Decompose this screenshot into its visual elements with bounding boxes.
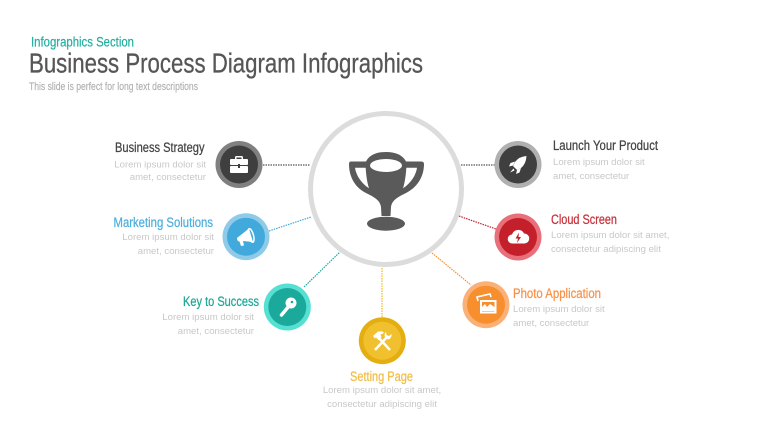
connector: setting page xyxy=(381,268,383,317)
label: business strategy xyxy=(114,140,207,183)
label: launch your product: amet, consectetur xyxy=(553,171,630,182)
icon: hammer and wrench xyxy=(373,332,392,350)
subtitle: This slide is perfect for long text descriptions xyxy=(29,81,198,93)
icon: megaphone xyxy=(237,228,255,246)
icon: key xyxy=(282,298,296,315)
label: key to success: Lorem ipsum dolor sit xyxy=(162,312,254,323)
connector: key to success xyxy=(304,252,340,287)
node: marketing solutions xyxy=(222,213,270,260)
node: business strategy xyxy=(216,141,262,188)
icon: rocket xyxy=(509,156,526,174)
label: cloud screen: Cloud Screen xyxy=(551,212,617,227)
label: setting page xyxy=(323,369,441,410)
label: launch your product: Lorem ipsum dolor sit xyxy=(553,157,645,168)
central trophy circle xyxy=(310,114,462,264)
label: key to success: Key to Success xyxy=(183,294,259,309)
title: Business Process Diagram Infographics xyxy=(29,48,423,78)
label: key to success xyxy=(162,294,259,337)
icon: cloud xyxy=(508,230,529,244)
connector: business strategy xyxy=(263,164,310,166)
label: cloud screen: Lorem ipsum dolor sit amet, xyxy=(551,230,669,241)
connector: launch your product xyxy=(461,164,495,166)
label: marketing solutions: amet, consectetur xyxy=(138,246,215,257)
label: photo application: Photo Application xyxy=(513,286,601,301)
connector: marketing solutions xyxy=(269,217,311,231)
node: setting page xyxy=(359,317,406,364)
label: photo application: amet, consectetur xyxy=(513,318,590,329)
icon: photos xyxy=(477,294,496,312)
label: cloud screen xyxy=(551,212,669,255)
label: photo application xyxy=(513,286,605,329)
label: cloud screen: consectetur adipiscing elit xyxy=(551,244,661,255)
label: business strategy: Business Strategy xyxy=(115,140,205,155)
connector: photo application xyxy=(432,253,471,285)
label: business strategy: amet, consectetur xyxy=(130,172,207,183)
icon: briefcase xyxy=(230,156,248,173)
node: key to success xyxy=(264,284,311,330)
node: launch your product xyxy=(494,141,542,188)
label: key to success: amet, consectetur xyxy=(178,326,255,337)
label: setting page: consectetur adipiscing elit xyxy=(327,399,437,410)
label: marketing solutions xyxy=(114,215,215,257)
label: launch your product: Launch Your Product xyxy=(553,138,658,153)
label: launch your product xyxy=(553,138,658,182)
node: photo application xyxy=(462,281,510,328)
node: cloud screen xyxy=(494,214,542,260)
icon: trophy xyxy=(349,152,424,231)
label: marketing solutions: Marketing Solutions xyxy=(114,215,213,230)
connector: cloud screen xyxy=(459,216,496,229)
label: setting page: Setting Page xyxy=(350,369,413,384)
label: business strategy: Lorem ipsum dolor sit xyxy=(114,160,206,170)
label: photo application: Lorem ipsum dolor sit xyxy=(513,304,605,315)
label: marketing solutions: Lorem ipsum dolor sit xyxy=(122,232,214,243)
section label: Infographics Section xyxy=(31,34,134,50)
label: setting page: Lorem ipsum dolor sit amet, xyxy=(323,385,441,396)
